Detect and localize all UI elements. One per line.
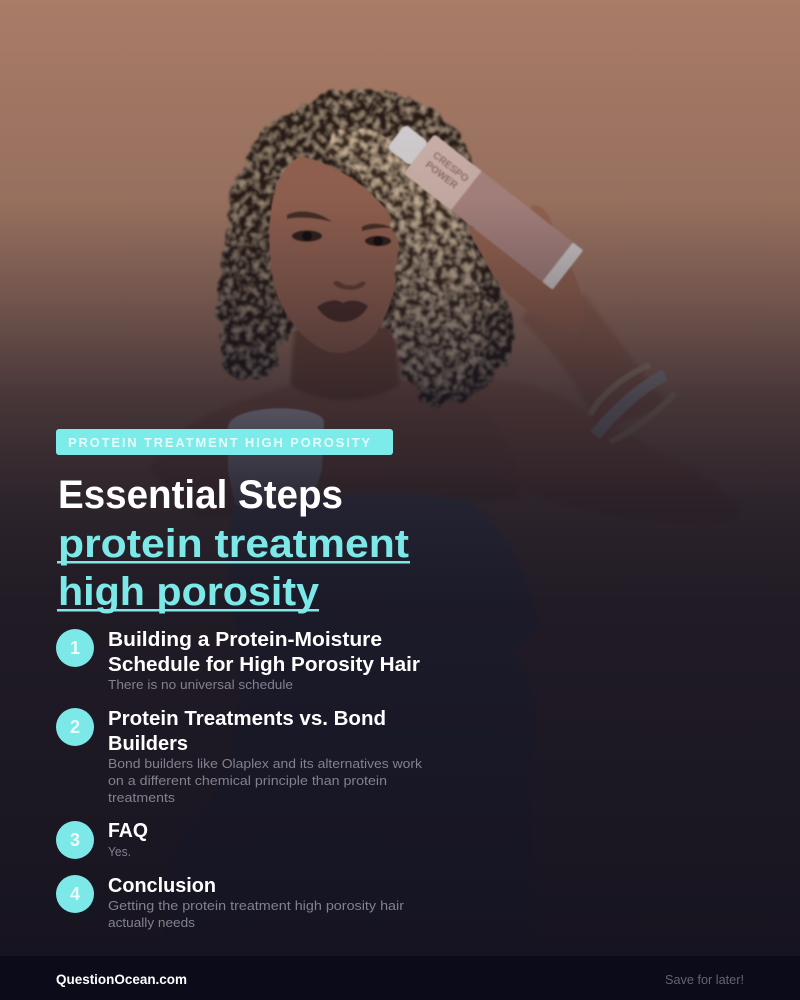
step 2: treatments [108,790,176,805]
eyebrows, eyes, nose and lips [287,211,392,322]
step 3 [56,820,148,859]
step 1: Building a Protein-Moisture [108,629,382,651]
face [269,156,399,353]
step 2: on a different chemical principle than protein [108,773,387,788]
step 4: Conclusion [108,875,216,897]
step 2: 2 [70,717,80,737]
jar [228,408,324,505]
hair back [218,90,512,406]
bottle [381,116,583,290]
footer: site name: QuestionOcean.com [56,971,187,987]
hand [467,205,584,335]
step 2: Builders [108,733,188,755]
step 2 [56,708,423,805]
step 1 [56,629,420,692]
bottle: CRESPO [430,150,470,185]
neck [290,320,400,400]
title [57,473,410,614]
step 3: Yes. [108,844,131,859]
hair front lock [330,126,485,393]
title: protein treatment [58,522,409,566]
step 3: 3 [70,830,80,850]
upper arm and forearm [470,295,742,526]
step 3: FAQ [108,820,148,842]
title: Essential Steps [58,473,343,517]
shoulders and chest [150,380,520,520]
title: high porosity [58,570,320,614]
step 4: 4 [70,884,80,904]
footer: save note: Save for later! [665,973,744,987]
photo: woman holding bottle [150,90,742,950]
footer bar [0,956,800,1000]
step 1: Schedule for High Porosity Hair [108,654,420,676]
step 2: Bond builders like Olaplex and its alternatives work [108,756,423,771]
step 4 [56,875,405,930]
step 2: Protein Treatments vs. Bond [108,708,386,730]
dress [165,495,538,950]
step 1: 1 [70,638,80,658]
bottle: POWER [423,160,460,192]
tag pill: PROTEIN TREATMENT HIGH POROSITY [68,435,370,450]
step 4: actually needs [108,915,196,930]
step 1: There is no universal schedule [108,677,293,692]
tag pill [56,429,393,455]
bracelets [590,365,675,442]
step 4: Getting the protein treatment high porosity hair [108,898,405,913]
